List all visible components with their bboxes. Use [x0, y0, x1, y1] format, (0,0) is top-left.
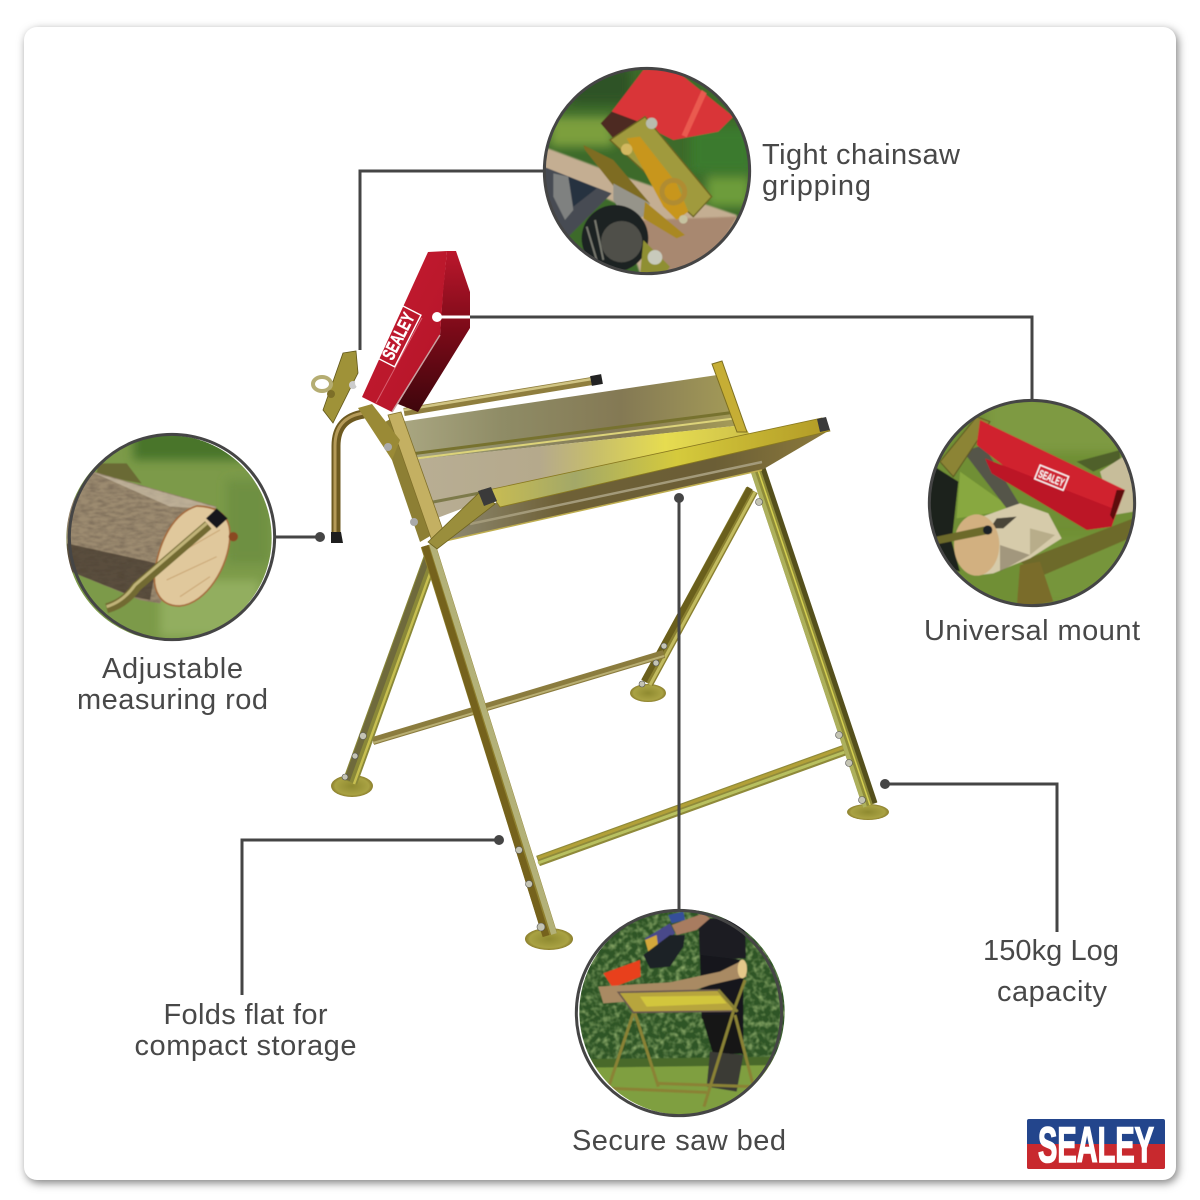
photo: chainsaw clamp detail [542, 66, 752, 276]
saw bed tray [380, 361, 830, 549]
label: log capacity: capacity [997, 976, 1108, 1008]
photo: secure saw bed in use [570, 905, 790, 1122]
feet [331, 684, 889, 950]
label: folds flat for compact storage: Folds flat for [164, 999, 328, 1031]
label: adjustable measuring rod: measuring rod [77, 684, 268, 716]
label: universal mount: Universal mount [924, 615, 1140, 647]
rear legs and crossbars [373, 488, 845, 863]
callout line: measuring rod [276, 532, 325, 542]
guard logo [375, 305, 421, 367]
label: adjustable measuring rod: Adjustable [102, 653, 243, 685]
label: adjustable measuring rod [77, 653, 268, 716]
photo: universal mount on log [920, 395, 1140, 610]
label: folds flat for compact storage: compact storage [134, 1030, 356, 1062]
label: tight chainsaw gripping: gripping [762, 170, 871, 202]
photo: universal mount on log: SEALEY [1037, 468, 1066, 490]
label: tight chainsaw gripping [762, 139, 961, 202]
product: folding sawhorse [313, 251, 889, 950]
label: tight chainsaw gripping: Tight chainsaw [762, 139, 961, 171]
measuring rod and handle [331, 379, 602, 543]
guard logo: SEALEY [378, 309, 419, 363]
callout line: chainsaw gripping [355, 171, 545, 388]
label: log capacity [983, 935, 1119, 1008]
bolts [342, 498, 866, 931]
label: log capacity: 150kg Log [983, 935, 1119, 967]
front legs [342, 468, 875, 936]
chainsaw bracket [313, 351, 418, 526]
callout line: folds flat [242, 835, 504, 995]
label: secure saw bed: Secure saw bed [572, 1125, 786, 1157]
callout line: universal mount [432, 312, 1032, 400]
label: folds flat for compact storage [134, 999, 356, 1062]
callout line: log capacity [880, 779, 1057, 932]
red log guard [362, 251, 470, 412]
photo: measuring rod on log [60, 430, 280, 645]
callout line: saw bed [674, 493, 684, 910]
